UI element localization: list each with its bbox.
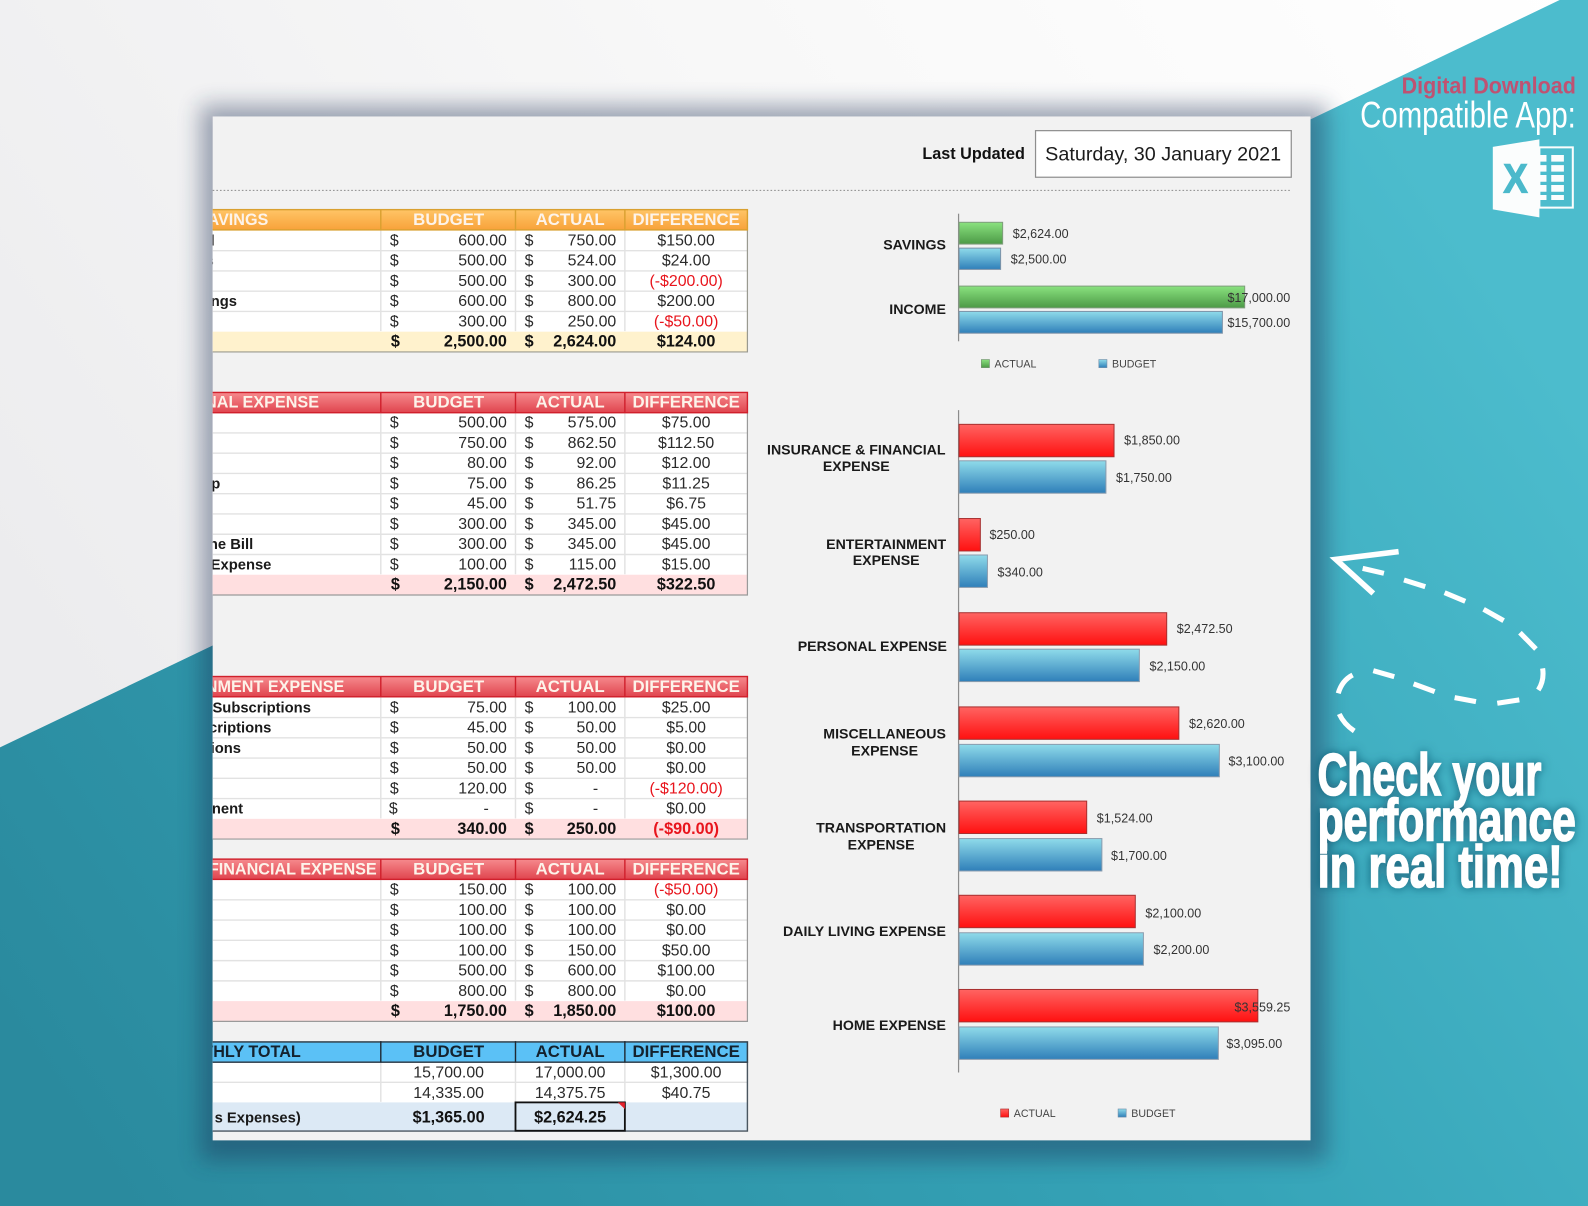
table: savings: $ xyxy=(525,232,534,249)
table: entertainment expense: 50.00 xyxy=(576,760,616,777)
table: personal expense: $322.50 xyxy=(657,576,715,594)
personal expense header: BUDGET xyxy=(413,392,485,411)
table: savings: 300.00 xyxy=(458,313,507,330)
table: savings: 2,624.00 xyxy=(553,333,616,351)
table: insurance and financial expense: 100.00 xyxy=(568,922,616,939)
table: savings: 750.00 xyxy=(568,232,616,249)
table: monthly total: 14,335.00 xyxy=(413,1085,484,1102)
savings header xyxy=(212,214,740,225)
table: personal expense: 115.00 xyxy=(569,556,616,573)
table: personal expense: 45.00 xyxy=(467,496,507,513)
table: entertainment expense: 50.00 xyxy=(576,720,616,737)
table: personal expense: $11.25 xyxy=(662,475,710,492)
value: savings actual: $2,624.00 xyxy=(1013,227,1069,241)
personal expense header: DIFFERENCE xyxy=(632,392,740,411)
net balance row: s Expenses) xyxy=(215,1110,301,1126)
table: personal expense: 862.50 xyxy=(568,435,616,452)
table: personal expense: $ xyxy=(525,496,534,513)
table: insurance and financial expense: $ xyxy=(525,882,534,899)
category: daily living expense: DAILY LIVING EXPENSE xyxy=(783,924,946,940)
entertainment expense header: DIFFERENCE xyxy=(632,677,740,696)
panel shadow xyxy=(201,105,1327,1161)
table: personal expense: $ xyxy=(525,455,534,472)
bars: insurance: $1,750.00 xyxy=(1116,471,1172,485)
table: savings: $ xyxy=(525,253,534,270)
table: entertainment expense: 120.00 xyxy=(458,780,507,797)
table: entertainment expense: $0.00 xyxy=(666,760,706,777)
table: personal expense: $12.00 xyxy=(662,455,711,472)
table: insurance and financial expense: 800.00 xyxy=(568,983,616,1000)
table: personal expense: $ xyxy=(525,556,534,573)
category: transportation expense: EXPENSE xyxy=(848,838,915,854)
table: insurance and financial expense: (-$50.00) xyxy=(654,882,718,899)
table: savings: $ xyxy=(390,273,399,290)
table: insurance and financial expense: $100.00 xyxy=(657,1002,715,1020)
table: savings: $ xyxy=(525,313,534,330)
table: insurance and financial expense: $ xyxy=(390,942,399,959)
table: savings: 600.00 xyxy=(458,232,507,249)
value: income budget: $15,700.00 xyxy=(1227,316,1290,330)
icon: excel: X xyxy=(1503,155,1528,201)
category: insurance and financial expense xyxy=(767,443,946,475)
last updated label: Last Updated xyxy=(922,145,1025,163)
table: savings: $ xyxy=(525,293,534,310)
bars: entertainment: $250.00 xyxy=(989,528,1035,542)
table: personal expense: $112.50 xyxy=(658,435,714,452)
table: entertainment expense: 50.00 xyxy=(467,760,507,777)
bars: transportation: $1,524.00 xyxy=(1097,811,1153,825)
insurance and financial expense header: FINANCIAL EXPENSE xyxy=(209,860,377,878)
table: personal expense: $ xyxy=(525,415,534,432)
table: savings: d xyxy=(206,233,215,249)
bars: entertainment xyxy=(959,519,1043,587)
table: insurance and financial expense: $ xyxy=(390,963,399,980)
table: savings: 524.00 xyxy=(568,253,616,270)
table: personal expense: $15.00 xyxy=(662,556,711,573)
table: personal expense: 300.00 xyxy=(458,516,507,533)
table: savings: (-$50.00) xyxy=(654,313,718,330)
category: income: INCOME xyxy=(889,302,946,318)
table: insurance and financial expense: $ xyxy=(525,922,534,939)
insurance and financial expense header xyxy=(212,863,740,874)
table: personal expense: $ xyxy=(525,576,534,594)
legend xyxy=(1001,1108,1176,1120)
table: entertainment expense: criptions xyxy=(209,721,271,737)
table: savings: s xyxy=(205,254,214,270)
table: personal expense: 75.00 xyxy=(467,475,507,492)
table: insurance and financial expense xyxy=(203,859,747,1022)
bars: home xyxy=(959,989,1290,1059)
table: monthly total: 14,375.75 xyxy=(535,1085,606,1102)
table: entertainment expense: $ xyxy=(390,720,399,737)
table: insurance and financial expense: $0.00 xyxy=(666,922,706,939)
category: savings: SAVINGS xyxy=(883,238,946,254)
category: insurance and financial expense: EXPENSE xyxy=(823,459,890,475)
savings header: BUDGET xyxy=(413,210,485,229)
table: personal expense: $45.00 xyxy=(662,536,711,553)
table: entertainment expense: - xyxy=(593,801,598,818)
bars: insurance: $1,850.00 xyxy=(1124,434,1180,448)
table: savings: ngs xyxy=(211,294,237,310)
savings header: DIFFERENCE xyxy=(632,210,740,229)
table: savings: $24.00 xyxy=(662,253,711,270)
table: insurance and financial expense: $0.00 xyxy=(666,983,706,1000)
table: entertainment expense: $ xyxy=(390,699,399,716)
category: transportation expense: TRANSPORTATION xyxy=(816,820,946,836)
table: insurance and financial expense: $50.00 xyxy=(662,942,711,959)
table: personal expense: $75.00 xyxy=(662,415,711,432)
table: entertainment expense: $5.00 xyxy=(666,720,706,737)
value: savings budget: $2,500.00 xyxy=(1011,252,1067,266)
table: entertainment expense: $ xyxy=(390,760,399,777)
table: insurance and financial expense: 100.00 xyxy=(458,902,507,919)
table: personal expense: p xyxy=(211,476,220,492)
table: personal expense: $ xyxy=(390,455,399,472)
bar: savings actual xyxy=(959,222,1003,244)
entertainment expense header: BUDGET xyxy=(413,677,485,696)
table: personal expense: $ xyxy=(390,536,399,553)
net balance row: $1,365.00 xyxy=(413,1108,485,1126)
table: insurance and financial expense: $ xyxy=(390,922,399,939)
legend: BUDGET xyxy=(1131,1108,1176,1120)
table: savings: 600.00 xyxy=(458,293,507,310)
table: personal expense: $ xyxy=(390,516,399,533)
table: insurance and financial expense: 100.00 xyxy=(568,902,616,919)
entertainment expense header: ACTUAL xyxy=(536,677,605,696)
table: entertainment expense: $0.00 xyxy=(666,740,706,757)
table: insurance and financial expense: 100.00 xyxy=(568,882,616,899)
table: personal expense: $ xyxy=(525,435,534,452)
bar: savings budget xyxy=(959,248,1001,269)
table: entertainment expense: $ xyxy=(389,801,398,818)
table: entertainment expense: - xyxy=(483,801,489,818)
table: entertainment expense: - xyxy=(593,780,598,797)
table: entertainment expense: Subscriptions xyxy=(212,700,311,716)
table: insurance and financial expense: $0.00 xyxy=(666,902,706,919)
table: savings: (-$200.00) xyxy=(649,273,723,290)
table: personal expense: $ xyxy=(390,435,399,452)
personal expense header: ACTUAL xyxy=(536,392,605,411)
table: savings: $124.00 xyxy=(657,333,715,351)
table: monthly total: $40.75 xyxy=(662,1085,711,1102)
category: miscellaneous expense: EXPENSE xyxy=(851,744,918,760)
category: entertainment expense: EXPENSE xyxy=(853,553,920,569)
table: personal expense: 300.00 xyxy=(458,536,507,553)
monthly total header: ACTUAL xyxy=(536,1042,605,1061)
table: personal expense: $45.00 xyxy=(662,516,711,533)
net balance row xyxy=(215,1110,606,1126)
table: savings xyxy=(197,210,747,352)
table: entertainment expense: $ xyxy=(525,801,534,818)
personal expense header: PERSONAL EXPENSE xyxy=(148,393,319,411)
bars: entertainment: $340.00 xyxy=(998,565,1043,579)
panel: spreadsheet dashboard xyxy=(126,116,1311,1140)
table: entertainment expense: $ xyxy=(525,720,534,737)
table: personal expense: 750.00 xyxy=(458,435,507,452)
table: entertainment expense: nent xyxy=(212,802,243,818)
table: personal expense: ne Bill xyxy=(209,537,253,553)
table: entertainment expense: $ xyxy=(390,780,399,797)
table: insurance and financial expense: $ xyxy=(390,983,399,1000)
table: savings: $ xyxy=(525,273,534,290)
insurance and financial expense header: BUDGET xyxy=(413,859,485,878)
category: entertainment expense: ENTERTAINMENT xyxy=(826,537,947,553)
insurance and financial expense header: DIFFERENCE xyxy=(632,859,740,878)
table: insurance and financial expense: 150.00 xyxy=(458,882,507,899)
category: miscellaneous expense: MISCELLANEOUS xyxy=(823,726,946,742)
table: insurance and financial expense: 100.00 xyxy=(458,942,507,959)
bars: miscellaneous xyxy=(959,707,1284,777)
table: savings: 500.00 xyxy=(458,273,507,290)
table: personal expense: $ xyxy=(525,516,534,533)
legend xyxy=(981,359,1157,371)
bars: daily living: $2,200.00 xyxy=(1154,943,1209,957)
table: personal expense: $ xyxy=(391,576,400,594)
table: insurance and financial expense: $ xyxy=(525,963,534,980)
table: savings: $150.00 xyxy=(657,232,715,249)
table: insurance and financial expense: 500.00 xyxy=(458,963,507,980)
entertainment expense header xyxy=(212,680,740,692)
legend: ACTUAL xyxy=(995,359,1037,371)
table: insurance and financial expense: $100.00 xyxy=(657,963,715,980)
table: personal expense: $ xyxy=(390,475,399,492)
table: entertainment expense: $ xyxy=(525,740,534,757)
bars: transportation xyxy=(959,801,1167,871)
table: personal expense: $ xyxy=(525,536,534,553)
table: entertainment expense: 250.00 xyxy=(567,820,616,838)
table: entertainment expense: (-$90.00) xyxy=(653,820,719,838)
chart: expenses xyxy=(767,410,1290,1120)
icon: excel xyxy=(1493,139,1573,217)
table: monthly total xyxy=(166,1041,747,1131)
table: savings: $ xyxy=(391,333,400,351)
table: monthly total: $1,300.00 xyxy=(651,1064,722,1081)
personal expense header xyxy=(212,396,740,408)
table: personal expense xyxy=(212,392,748,596)
table: personal expense: 345.00 xyxy=(568,516,616,533)
table: monthly total: 15,700.00 xyxy=(413,1064,484,1081)
monthly total header: DIFFERENCE xyxy=(632,1042,740,1061)
bars: home: $3,559.25 xyxy=(1235,1001,1290,1015)
entertainment expense header: ENTERTAINMENT EXPENSE xyxy=(126,678,345,696)
category: entertainment expense xyxy=(826,537,947,569)
table: entertainment expense: ions xyxy=(211,741,241,757)
table: entertainment expense xyxy=(212,676,748,840)
table: entertainment expense: 75.00 xyxy=(467,699,507,716)
table: entertainment expense: 50.00 xyxy=(576,740,616,757)
table: entertainment expense: $ xyxy=(525,780,534,797)
table: savings: $200.00 xyxy=(657,293,715,310)
savings header: SAVINGS xyxy=(197,211,269,229)
table: entertainment expense: 100.00 xyxy=(568,699,616,716)
table: insurance and financial expense: $ xyxy=(390,902,399,919)
bars: home: $3,095.00 xyxy=(1226,1037,1282,1051)
table: insurance and financial expense: 150.00 xyxy=(568,942,616,959)
table: savings: $ xyxy=(390,253,399,270)
last updated date box xyxy=(1036,131,1291,177)
table: insurance and financial expense: $ xyxy=(391,1002,400,1020)
table: entertainment expense: $ xyxy=(525,699,534,716)
table: savings: 300.00 xyxy=(568,273,616,290)
bars: personal xyxy=(959,613,1233,682)
table: monthly total: 17,000.00 xyxy=(535,1064,606,1081)
monthly total header: BUDGET xyxy=(413,1042,485,1061)
table: insurance and financial expense: 1,850.00 xyxy=(553,1002,616,1020)
bars: miscellaneous: $2,620.00 xyxy=(1189,717,1245,731)
table: entertainment expense: (-$120.00) xyxy=(649,780,723,797)
table: insurance and financial expense: $ xyxy=(525,902,534,919)
table: personal expense: $ xyxy=(390,496,399,513)
table: entertainment expense: 45.00 xyxy=(467,720,507,737)
table: personal expense: Expense xyxy=(211,557,271,573)
table: entertainment expense: $25.00 xyxy=(662,699,711,716)
table: insurance and financial expense: $ xyxy=(525,1002,534,1020)
table: insurance and financial expense: 1,750.00 xyxy=(444,1002,507,1020)
table: personal expense: $ xyxy=(390,415,399,432)
table: savings: 800.00 xyxy=(568,293,616,310)
net balance row: $2,624.25 xyxy=(534,1108,606,1126)
bar: income actual xyxy=(959,286,1245,308)
last updated date box: Saturday, 30 January 2021 xyxy=(1045,144,1281,166)
table: personal expense: 92.00 xyxy=(576,455,616,472)
table: insurance and financial expense: 600.00 xyxy=(568,963,616,980)
table: personal expense: 100.00 xyxy=(458,556,507,573)
table: entertainment expense: $0.00 xyxy=(666,801,706,818)
category: personal expense: PERSONAL EXPENSE xyxy=(798,639,947,655)
table: entertainment expense: $ xyxy=(525,820,534,838)
table: entertainment expense: 50.00 xyxy=(467,740,507,757)
bars: daily living: $2,100.00 xyxy=(1145,907,1201,921)
table: insurance and financial expense: 100.00 xyxy=(458,922,507,939)
bars: personal: $2,150.00 xyxy=(1149,659,1205,673)
table: personal expense: 2,150.00 xyxy=(444,576,507,594)
table: savings: 500.00 xyxy=(458,253,507,270)
bars: personal: $2,472.50 xyxy=(1177,622,1233,636)
chart: savings and income xyxy=(883,214,1290,371)
table: entertainment expense: 340.00 xyxy=(457,820,507,838)
table: savings: $ xyxy=(390,232,399,249)
bars: daily living xyxy=(959,895,1209,965)
table: insurance and financial expense: $ xyxy=(525,983,534,1000)
monthly total header: MONTHLY TOTAL xyxy=(166,1043,301,1061)
table: personal expense: 2,472.50 xyxy=(553,576,616,594)
category: insurance and financial expense: INSURANCE & FINANCIAL xyxy=(767,443,946,459)
table: personal expense: $6.75 xyxy=(666,496,706,513)
table: savings: 2,500.00 xyxy=(444,333,507,351)
arrow: dashed looping arrow xyxy=(1336,552,1543,731)
selected cell xyxy=(515,1102,625,1131)
table: entertainment expense: $ xyxy=(390,740,399,757)
value: income actual: $17,000.00 xyxy=(1227,291,1290,305)
bars: insurance xyxy=(959,424,1180,493)
bars: miscellaneous: $3,100.00 xyxy=(1228,755,1284,769)
table: savings: 250.00 xyxy=(568,313,616,330)
table: personal expense: $ xyxy=(525,475,534,492)
table: insurance and financial expense: $ xyxy=(525,942,534,959)
savings header: ACTUAL xyxy=(536,210,605,229)
digital download label: Digital Download xyxy=(1402,73,1576,99)
table: personal expense: 500.00 xyxy=(458,415,507,432)
table: entertainment expense: $ xyxy=(391,820,400,838)
bars: transportation: $1,700.00 xyxy=(1111,849,1167,863)
legend: BUDGET xyxy=(1112,359,1157,371)
headline: check your performance in real time xyxy=(1318,741,1576,900)
table: insurance and financial expense: $ xyxy=(390,882,399,899)
category: miscellaneous expense xyxy=(823,726,946,760)
bar: income budget xyxy=(959,311,1222,333)
table: savings: $ xyxy=(390,313,399,330)
table: insurance and financial expense: 800.00 xyxy=(458,983,507,1000)
table: personal expense: 51.75 xyxy=(576,496,616,513)
table: personal expense: 86.25 xyxy=(576,475,616,492)
monthly total header xyxy=(212,1046,740,1057)
table: personal expense: 575.00 xyxy=(568,415,616,432)
table: personal expense: $ xyxy=(390,556,399,573)
legend: ACTUAL xyxy=(1014,1108,1056,1120)
table: personal expense: 80.00 xyxy=(467,455,507,472)
category: transportation expense xyxy=(816,820,946,854)
table: savings: $ xyxy=(390,293,399,310)
table: savings: $ xyxy=(525,333,534,351)
table: personal expense: 345.00 xyxy=(568,536,616,553)
table: entertainment expense: $ xyxy=(525,760,534,777)
insurance and financial expense header: ACTUAL xyxy=(536,859,605,878)
category: home expense: HOME EXPENSE xyxy=(833,1018,946,1034)
